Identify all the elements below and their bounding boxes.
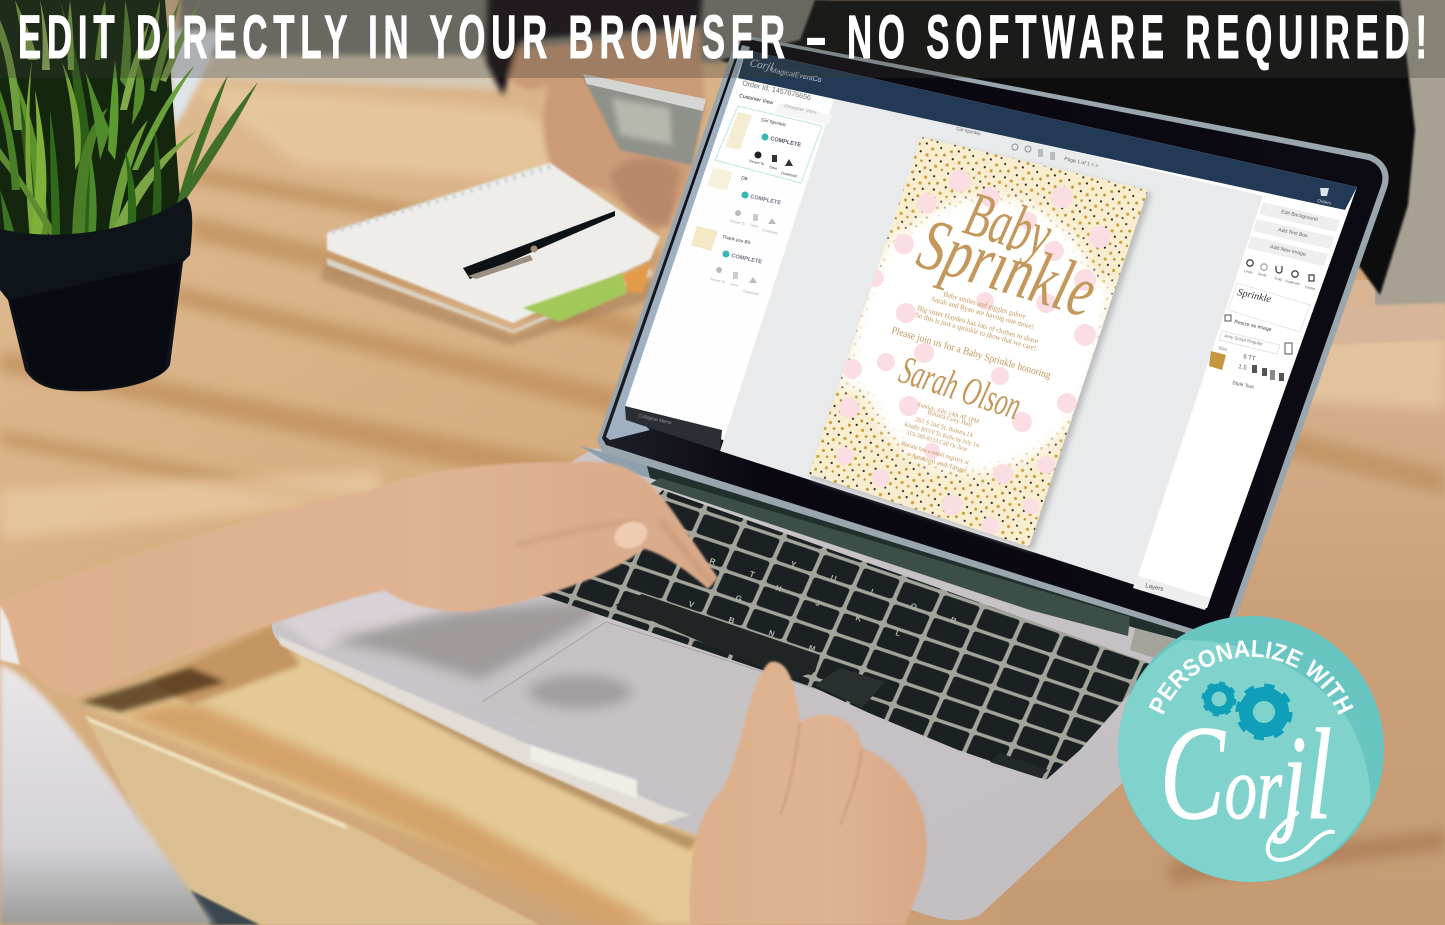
black bezel bbox=[602, 38, 1382, 636]
style text dropdown: Style Text bbox=[1232, 380, 1255, 391]
sidebar: Designer View bbox=[784, 103, 817, 116]
resize checkbox bbox=[1225, 315, 1272, 333]
Corjl script wordmark: Corjl bbox=[1160, 699, 1332, 848]
font selector: Size bbox=[1218, 345, 1228, 352]
table front face bbox=[85, 715, 540, 925]
card details: Amazon and Target bbox=[910, 452, 967, 475]
notebook spiral bbox=[332, 166, 552, 232]
third item: Thank you BS bbox=[722, 234, 751, 245]
key letters: O bbox=[909, 601, 918, 612]
second item: COMPLETE bbox=[750, 194, 782, 207]
right tool panel: Add Text Box bbox=[1278, 227, 1309, 239]
display bbox=[625, 50, 1357, 610]
table surface near front bbox=[78, 635, 700, 925]
orders cart icon: Orders bbox=[1317, 198, 1333, 206]
gold colour swatch bbox=[1209, 351, 1226, 370]
green sticky note bbox=[523, 273, 627, 322]
card heading Sprinkle: Sprinkle bbox=[909, 203, 1105, 334]
selected item card: Download bbox=[781, 171, 797, 178]
layers dropdown: Layers bbox=[1145, 582, 1164, 593]
grass blades bbox=[0, 0, 258, 240]
second item: Save bbox=[750, 223, 759, 229]
light gap behind leaves bbox=[170, 30, 225, 130]
badge arc text: PERSONALIZE WITH bbox=[1148, 640, 1354, 715]
selected item card bbox=[715, 106, 822, 183]
key letters: I bbox=[869, 587, 874, 597]
white centre bbox=[830, 170, 1130, 535]
background arm and hand holding phone bbox=[486, 0, 705, 232]
key letters: U bbox=[829, 573, 838, 584]
selected item card: Save bbox=[769, 165, 778, 171]
third item: Revert To bbox=[710, 277, 726, 284]
card shadow bbox=[811, 140, 1152, 550]
layers dropdown bbox=[1133, 575, 1210, 610]
second item: DB bbox=[741, 175, 748, 181]
invitation card bbox=[809, 137, 1152, 550]
right tool panel: Redo bbox=[1258, 272, 1267, 278]
right tool panel bbox=[1133, 196, 1345, 610]
front highlight line bbox=[85, 716, 348, 830]
wordmark flourish bbox=[1268, 813, 1333, 860]
Corjl badge bbox=[1118, 616, 1384, 882]
right tool panel: Add New Image bbox=[1270, 244, 1306, 258]
trackpad bbox=[482, 622, 820, 805]
sidebar bbox=[625, 79, 832, 451]
notebook with pen bbox=[320, 163, 660, 345]
orange sticky note bbox=[623, 263, 650, 293]
lower right arrow keys bbox=[815, 668, 885, 708]
key letters: G bbox=[734, 593, 743, 604]
card details: Sunday, July 14th AT 1PM bbox=[916, 401, 980, 426]
left hand typing bbox=[0, 462, 718, 697]
text format icons: 6 TT bbox=[1243, 353, 1256, 363]
right tool panel: Undo bbox=[1244, 269, 1253, 275]
card details: Kindly RSVP To Kelle by July 1st bbox=[903, 421, 981, 449]
selected item card: Revert To bbox=[749, 159, 765, 166]
pen bbox=[463, 211, 615, 279]
key letters: T bbox=[748, 569, 756, 579]
large gear bbox=[1238, 686, 1290, 738]
card details: 319-360-8133 Call Or Text bbox=[905, 429, 968, 453]
resize checkbox: Resize as Image bbox=[1234, 319, 1272, 333]
canvas toolbar: Page 1 of 1 < > bbox=[1064, 156, 1099, 169]
front lip bbox=[278, 636, 690, 824]
key letters bbox=[687, 556, 958, 654]
header bar bbox=[738, 50, 1357, 210]
key letters: M bbox=[807, 643, 817, 654]
person seated behind laptop: dark shirt bbox=[720, 0, 1415, 295]
text preview box bbox=[1228, 283, 1310, 332]
title band bbox=[0, 0, 1445, 78]
right tool panel: Snap bbox=[1274, 276, 1283, 282]
grey canvas bbox=[720, 96, 1263, 585]
key letters: R bbox=[708, 556, 717, 567]
key letters: P bbox=[949, 615, 958, 626]
hand shadow on palm rest bbox=[330, 600, 600, 680]
right hand bbox=[690, 662, 927, 925]
grey-blue left bezel bbox=[606, 45, 750, 440]
lilac highlight bbox=[280, 590, 500, 650]
key letters: Y bbox=[789, 559, 798, 570]
card verse: Sarah and Ryan are having one more! bbox=[930, 294, 1035, 331]
small gear bbox=[1204, 684, 1234, 714]
collapse menu bar: Collapse Menu bbox=[638, 413, 672, 426]
white sleeve bbox=[0, 605, 215, 925]
second item bbox=[707, 168, 782, 235]
glitter background bbox=[809, 137, 1148, 547]
third item: Download bbox=[743, 289, 759, 296]
keyboard bbox=[541, 490, 1155, 780]
title text: EDIT DIRECTLY IN YOUR BROWSER – NO SOFTWARE REQUIRED! bbox=[18, 3, 1427, 72]
laptop base bbox=[272, 448, 1230, 920]
plant bbox=[0, 0, 258, 391]
font selector bbox=[1218, 331, 1292, 354]
header bar: Corjl bbox=[748, 57, 775, 74]
text preview box: Sprinkle bbox=[1236, 287, 1272, 305]
card name: Sarah Olson bbox=[894, 347, 1027, 428]
app base bbox=[625, 50, 1357, 608]
silver outer frame bbox=[597, 34, 1389, 642]
card invitation line: Please join us for a Baby Sprinkle honoring bbox=[890, 325, 1052, 382]
panel buttons bbox=[1247, 202, 1340, 266]
arm shadow on table bbox=[80, 668, 225, 712]
key letters: H bbox=[774, 583, 783, 594]
phone bbox=[583, 74, 706, 165]
canvas toolbar bbox=[956, 126, 1099, 169]
card verse bbox=[914, 289, 1040, 352]
key letters: K bbox=[854, 613, 863, 624]
card details: Bolstra Cozy Hall bbox=[926, 409, 973, 429]
plant pot bbox=[0, 197, 192, 391]
card verse: Baby smiles and giggles galore bbox=[942, 289, 1027, 321]
card verse: So this is just a sprinkle to show that we care! bbox=[914, 310, 1037, 352]
card heading Baby: Baby bbox=[957, 177, 1060, 271]
third item bbox=[691, 226, 763, 296]
card details: Ronals has a small registry at bbox=[900, 440, 970, 466]
text format icons: 1.5 bbox=[1238, 363, 1248, 372]
wood strip beside arm bbox=[150, 625, 300, 705]
dark gap beneath the table bbox=[190, 890, 260, 925]
sidebar: Order Id: 1457876656 bbox=[742, 79, 812, 102]
page curl lighter area bbox=[1118, 640, 1370, 882]
sidebar: Customer View bbox=[739, 93, 774, 106]
dark sleeve bbox=[486, 0, 702, 96]
key letters: L bbox=[894, 628, 902, 638]
blurred background wall bbox=[175, 0, 1445, 345]
pink polka dots bbox=[836, 170, 1111, 535]
card details: 265 S 2nd St, Bolstra IA bbox=[914, 416, 974, 440]
tool icons bbox=[1247, 260, 1314, 281]
index finger shade bbox=[660, 520, 712, 583]
laptop screen lid bbox=[597, 34, 1389, 642]
font selector: Amy Script Regular bbox=[1224, 333, 1264, 347]
third item: Save bbox=[730, 282, 739, 288]
selected item card: COMPLETE bbox=[770, 136, 802, 149]
orange grain band bbox=[120, 703, 660, 925]
notebook shadow bbox=[320, 262, 660, 345]
hinge strip bbox=[580, 446, 1225, 668]
badge disc bbox=[1118, 616, 1384, 882]
canvas toolbar: Girl Sprinkle bbox=[956, 126, 982, 136]
text format icons bbox=[1238, 353, 1284, 381]
key letters: V bbox=[687, 599, 696, 610]
second item: Download bbox=[762, 228, 778, 235]
collapse menu bar bbox=[625, 406, 722, 451]
second item: Revert To bbox=[730, 219, 746, 226]
selected item card: Girl Sprinkle bbox=[761, 117, 787, 127]
right tool panel: Duplicate bbox=[1285, 279, 1300, 286]
foliage mass bbox=[0, 0, 180, 245]
right tool panel: Delete bbox=[1305, 285, 1316, 291]
base body bbox=[272, 448, 1230, 920]
base shadow bbox=[275, 640, 700, 850]
key letters: B bbox=[727, 615, 736, 626]
thumbnail bbox=[611, 517, 651, 553]
orders cart icon bbox=[1317, 188, 1333, 206]
key letters: N bbox=[767, 628, 776, 639]
right tool panel: Edit Background bbox=[1281, 209, 1319, 223]
header bar: MagicalEventCo bbox=[769, 65, 823, 84]
spacebar bbox=[615, 594, 820, 680]
third item: COMPLETE bbox=[731, 253, 763, 266]
notebook pages bbox=[327, 258, 652, 333]
thumb crease bbox=[515, 522, 640, 545]
card details bbox=[900, 401, 981, 475]
card verse: Big sister Hayden has lots of clothes to share bbox=[916, 303, 1040, 345]
key letters: J bbox=[814, 598, 821, 608]
forearm and hand bbox=[0, 462, 718, 697]
